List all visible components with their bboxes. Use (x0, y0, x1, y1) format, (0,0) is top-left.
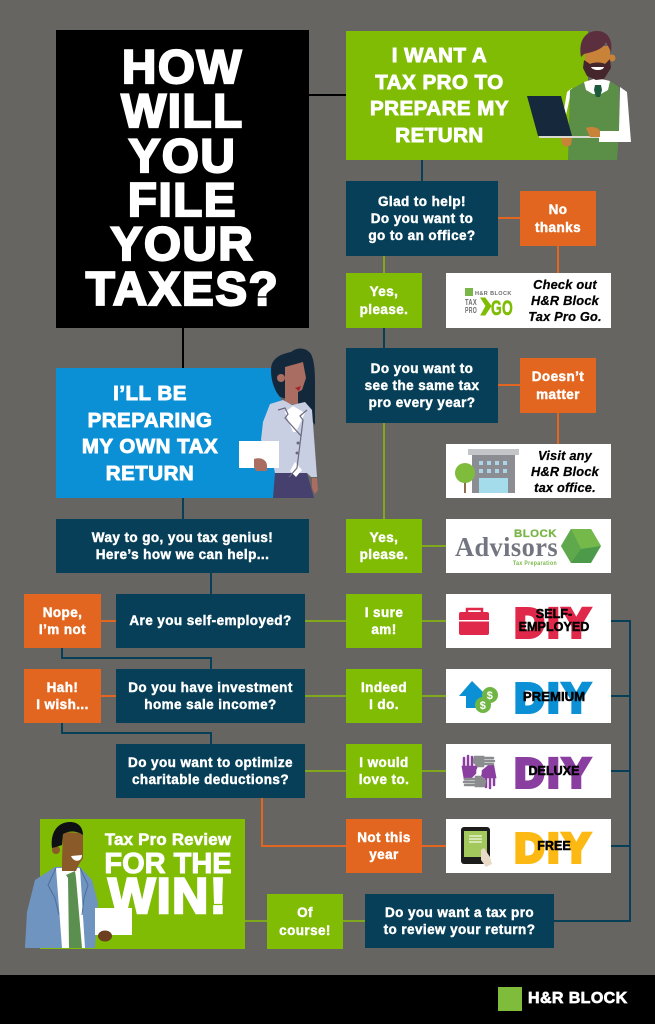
logo: DIY self-employed: SELF- (536, 607, 572, 621)
question: same tax pro: Do you want to (371, 361, 473, 376)
icon: Tax Pro Go logo: PRO (465, 306, 477, 315)
icon: man with laptop (527, 31, 631, 160)
text: visit any office: tax office. (534, 480, 596, 495)
panel: tax pro review for the win (25, 819, 245, 949)
card: Tax Pro Go (446, 273, 611, 328)
title: TAXES? (86, 263, 279, 316)
heading: tax pro review: Tax Pro Review (105, 830, 231, 849)
text: visit any office: Visit any (538, 448, 592, 463)
question: go to an office: go to an office? (368, 228, 476, 243)
card: DIY free (446, 819, 611, 873)
banner: way to go: Here’s how we can help... (96, 547, 269, 562)
heading: I want a tax pro: RETURN (395, 124, 484, 147)
footer bar (0, 975, 655, 1024)
answer: nope (24, 594, 101, 648)
logo: Block Advisors: Tax Preparation (513, 561, 557, 567)
answer: doesn't matter: Doesn’t (532, 369, 584, 384)
icon: office building and tree (455, 449, 519, 493)
heading: I'll be preparing: PREPARING (88, 409, 212, 432)
icon: four hands (462, 754, 496, 790)
icon: Tax Pro Go logo: H&R BLOCK (475, 291, 512, 297)
answer: hah: Hah! (47, 680, 78, 695)
answer: indeed I do: Indeed (361, 680, 407, 695)
question: charitable deductions: charitable deductions? (132, 772, 289, 787)
question: tax pro review: Do you want a tax pro (385, 905, 534, 920)
answer: nope: Nope, (43, 605, 82, 620)
logo: DIY premium: DIY (515, 675, 593, 721)
question: investment income (116, 669, 305, 723)
title: YOU (129, 130, 236, 183)
panel: prepare my own return (56, 348, 318, 498)
answer: not this year: Not this (357, 830, 411, 845)
question: self-employed (116, 594, 305, 648)
answer: yes please (346, 273, 422, 328)
answer: no thanks (520, 191, 596, 246)
heading: I'll be preparing: RETURN (106, 462, 194, 485)
question: charitable deductions (116, 744, 305, 798)
text: check out Tax Pro Go: H&R Block (531, 293, 599, 308)
icon: briefcase (459, 608, 489, 635)
card: visit any tax office (446, 444, 611, 498)
logo: DIY deluxe: DELUXE (528, 764, 580, 778)
heading: I'll be preparing: I’LL BE (113, 382, 187, 405)
answer: of course: Of (297, 905, 313, 920)
logo: DIY deluxe: DIY (515, 750, 593, 796)
logo: DIY self-employed: DIY (515, 600, 593, 646)
heading: I want a tax pro: PREPARE MY (370, 97, 509, 120)
title: HOW (122, 41, 243, 94)
icon: woman with paper (239, 348, 318, 498)
logo: Block Advisors: Advisors (455, 532, 558, 562)
answer: yes please 2: please. (360, 547, 408, 562)
card: DIY deluxe (446, 744, 611, 798)
logo: DIY free: DIY (515, 825, 593, 871)
heading: I'll be preparing: MY OWN TAX (82, 435, 218, 458)
question: tax pro review: to review your return? (384, 922, 535, 937)
answer: I would love to: love to. (359, 772, 409, 787)
answer: I sure am (346, 594, 422, 648)
heading: I want a tax pro (370, 44, 509, 147)
banner: way to go (56, 519, 309, 573)
question: go to an office: Do you want to (371, 211, 473, 226)
question: go to an office: Glad to help! (378, 194, 466, 209)
title: YOUR (111, 218, 254, 271)
text: check out Tax Pro Go: Tax Pro Go. (528, 309, 602, 324)
logo: Block Advisors (455, 528, 601, 567)
question: go to an office (346, 181, 498, 256)
answer: I sure am: I sure (365, 605, 403, 620)
icon: house with coins: $ (487, 690, 493, 702)
answer: not this year: year (369, 847, 399, 862)
text: visit any office: H&R Block (531, 464, 599, 479)
logo: DIY self-employed: EMPLOYED (519, 620, 589, 634)
heading: I'll be preparing (82, 382, 218, 485)
icon: house with coins (459, 681, 498, 713)
answer: of course (267, 894, 343, 949)
text: check out Tax Pro Go: Check out (533, 277, 597, 292)
icon: Tax Pro Go logo (465, 288, 513, 320)
logo: H&R Block (498, 987, 628, 1011)
banner: way to go: Way to go, you tax genius! (92, 530, 273, 545)
logo: DIY premium: PREMIUM (523, 689, 585, 704)
answer: yes please: please. (360, 302, 408, 316)
question: tax pro review (365, 894, 554, 948)
question: investment income: home sale income? (144, 697, 277, 712)
text: visit any office (531, 448, 600, 495)
card: DIY self-employed (446, 594, 611, 648)
answer: yes please: Yes, (370, 284, 398, 299)
answer: I would love to: I would (359, 755, 409, 770)
text: check out Tax Pro Go (528, 277, 602, 324)
card: Block Advisors (446, 519, 611, 573)
title: WILL (121, 85, 244, 138)
icon: Tax Pro Go logo: GO (491, 297, 513, 320)
icon: Tax Pro Go logo: TAX (465, 298, 477, 307)
answer: hah: I wish... (36, 697, 89, 712)
logo: DIY free: FREE (537, 839, 571, 853)
answer: hah (24, 669, 101, 723)
heading: win: WIN! (108, 868, 228, 924)
answer: yes please 2: Yes, (370, 530, 398, 545)
answer: indeed I do (346, 669, 422, 723)
answer: doesn't matter: matter (536, 386, 580, 402)
icon: house with coins: $ (480, 700, 486, 712)
answer: yes please 2 (346, 519, 422, 573)
answer: of course: course! (279, 922, 331, 938)
question: self-employed: Are you self-employed? (129, 613, 292, 628)
logo: H&R Block: H&R BLOCK (528, 990, 628, 1007)
title: FILE (128, 174, 237, 227)
answer: nope: I’m not (39, 622, 86, 637)
question: charitable deductions: Do you want to optimize (128, 755, 293, 770)
title (56, 30, 309, 328)
card: DIY premium (446, 669, 611, 723)
panel: tax pro path header (346, 31, 631, 160)
question: investment income: Do you have investment (128, 680, 293, 695)
question: same tax pro (346, 348, 498, 423)
heading: for the: FOR THE (104, 848, 232, 880)
icon: tablet (461, 827, 492, 867)
answer: no thanks: thanks (535, 220, 581, 234)
heading: I want a tax pro: I WANT A (392, 44, 487, 67)
answer: no thanks: No (549, 202, 567, 217)
logo: Block Advisors: BLOCK (514, 528, 557, 540)
answer: I would love to (346, 744, 422, 798)
question: same tax pro: see the same tax (365, 378, 479, 393)
heading: I want a tax pro: TAX PRO TO (375, 71, 504, 94)
answer: doesn't matter (520, 358, 596, 413)
icon: man in suit with paper (25, 822, 132, 948)
question: same tax pro: pro every year? (369, 395, 475, 410)
answer: I sure am: am! (371, 622, 397, 637)
answer: indeed I do: I do. (369, 697, 399, 712)
answer: not this year (346, 819, 422, 873)
